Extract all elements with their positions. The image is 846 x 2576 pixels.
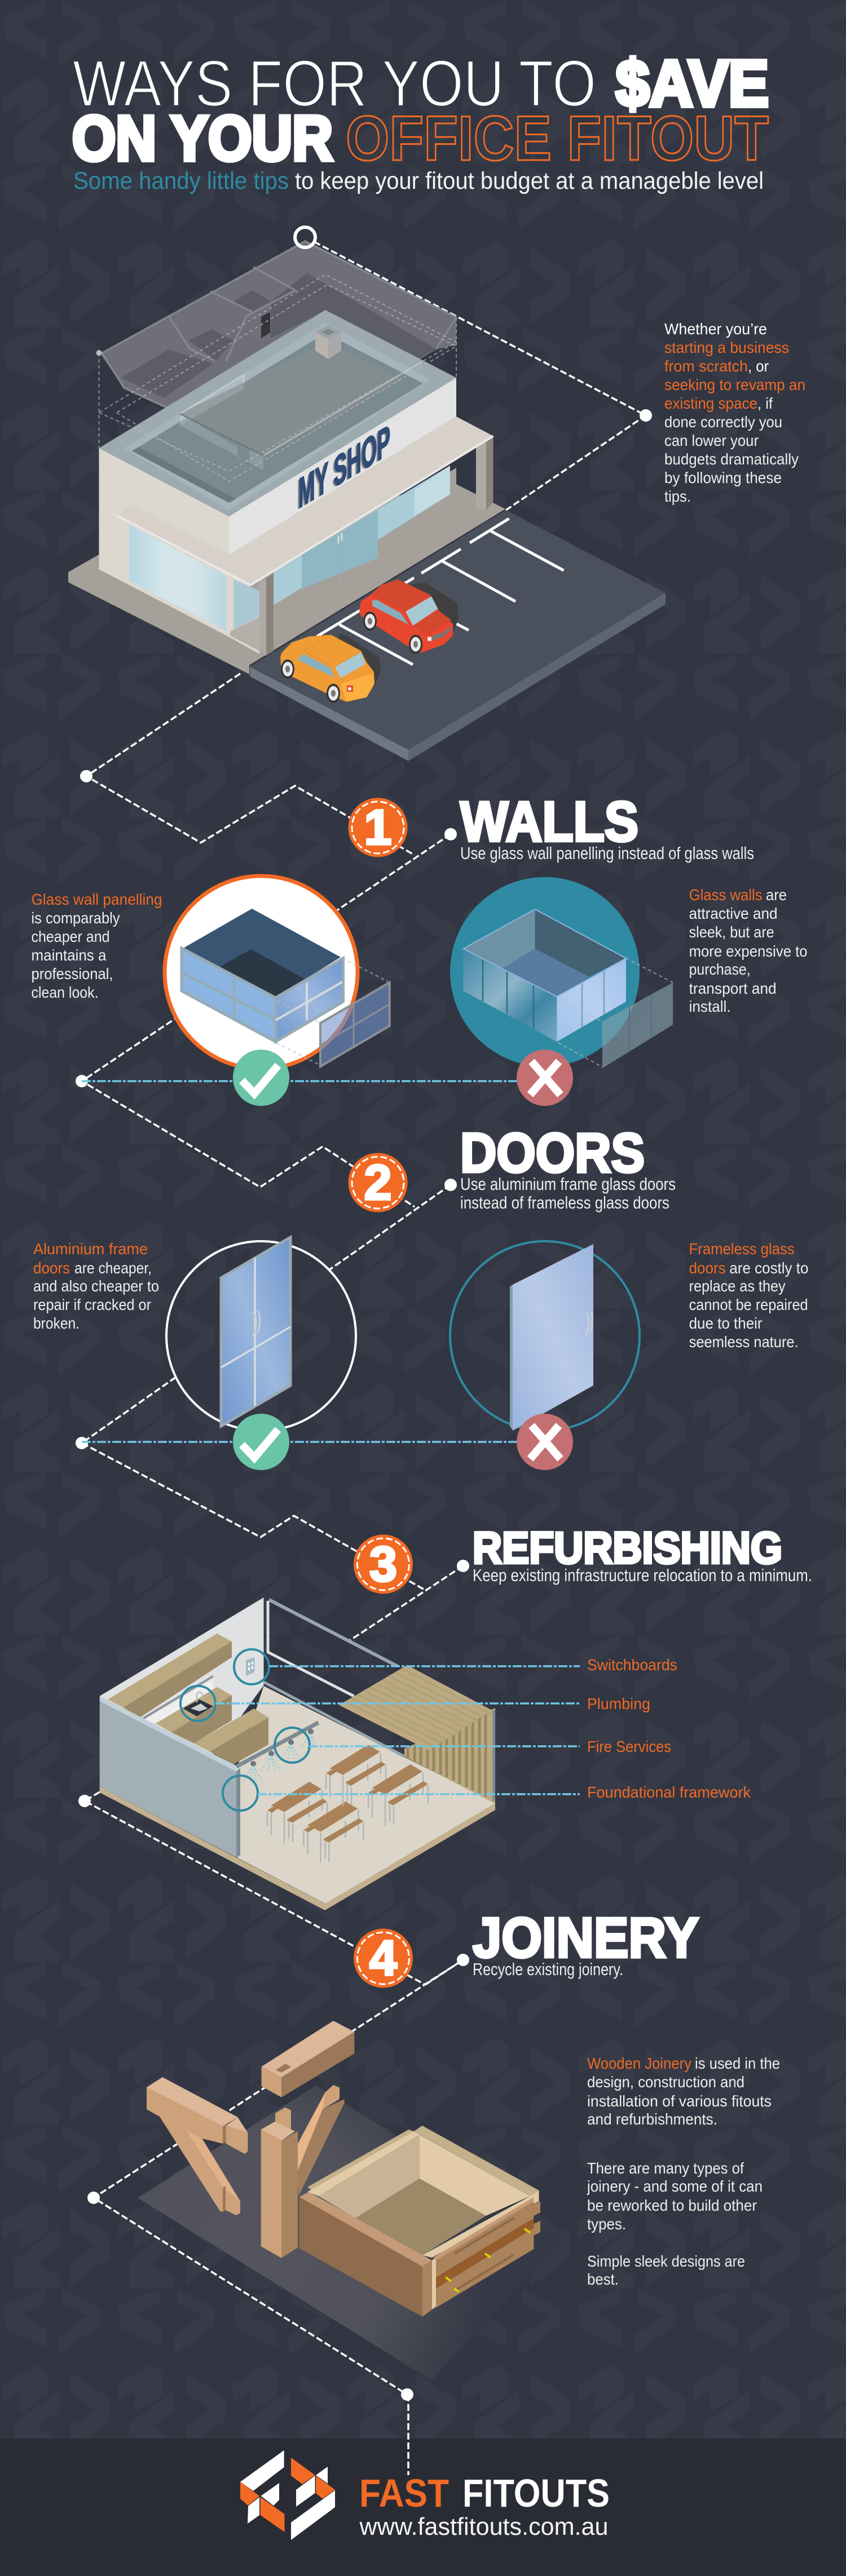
heading: doors: DOORS bbox=[460, 1122, 645, 1184]
switchboards leader bbox=[234, 1649, 580, 1684]
illustration: shop building bbox=[68, 241, 505, 674]
panel text: glass walls: install. bbox=[689, 998, 731, 1015]
panel text: aluminium frame doors: repair if cracked or bbox=[33, 1296, 151, 1313]
translucent ghost wall overlay bbox=[180, 362, 422, 470]
intro paragraph: , or bbox=[748, 357, 769, 375]
panel text: aluminium frame doors: broken. bbox=[33, 1314, 80, 1332]
top ring marker bbox=[295, 227, 315, 247]
illustration: shop building: MY SHOP bbox=[298, 416, 390, 518]
rear wall under awning bbox=[265, 468, 456, 631]
roof chimney bbox=[315, 325, 341, 359]
pillar front bbox=[230, 573, 274, 656]
handle bbox=[585, 1311, 592, 1335]
back wall bbox=[100, 1597, 263, 1776]
heading: refurbishing: REFURBISHING bbox=[473, 1522, 782, 1573]
joinery paragraph: Simple sleek designs are bbox=[587, 2252, 745, 2270]
cross icon: walls bbox=[517, 1050, 573, 1106]
walls subheading: Use glass wall panelling instead of glass walls bbox=[460, 843, 754, 863]
refurbishing labels: Plumbing bbox=[587, 1695, 650, 1712]
pillar right bbox=[476, 436, 493, 510]
glass leaf bbox=[513, 1244, 593, 1431]
panel text: glass wall panelling: professional, bbox=[32, 965, 113, 982]
base slab bbox=[68, 484, 505, 674]
connector: doors section bbox=[76, 1179, 457, 1590]
title word save: $AVE bbox=[616, 47, 769, 120]
glass shop front bbox=[274, 466, 450, 605]
joinery paragraph: and refurbishments. bbox=[587, 2110, 717, 2128]
dining tables bbox=[267, 1745, 428, 1863]
panel text: aluminium frame doors: are cheaper, bbox=[74, 1259, 152, 1277]
doors subheading bbox=[460, 1174, 676, 1212]
parking lines bbox=[317, 519, 564, 665]
footer website: www.fastfitouts.com.au bbox=[359, 2513, 608, 2540]
panel text: glass walls: Glass walls bbox=[689, 886, 763, 904]
footer brand name: FITOUTS bbox=[462, 2471, 610, 2515]
ring bbox=[166, 1241, 356, 1431]
connector: refurbishing section bbox=[78, 1560, 469, 1985]
doors subheading: instead of frameless glass doors bbox=[460, 1193, 669, 1212]
refurbishing labels bbox=[587, 1656, 751, 1801]
right glass bbox=[557, 958, 626, 1042]
red car bbox=[359, 579, 459, 654]
panel text: glass wall panelling: clean look. bbox=[32, 984, 98, 1001]
door leaf bbox=[221, 1237, 290, 1426]
panel text: frameless glass doors: seemless nature. bbox=[689, 1333, 799, 1351]
floor base bbox=[100, 1787, 495, 1910]
awning bbox=[116, 417, 493, 585]
roof bbox=[99, 310, 456, 516]
panel text: frameless glass doors: replace as they bbox=[689, 1277, 786, 1295]
joinery paragraph: be reworked to build other bbox=[587, 2197, 757, 2214]
white circle bbox=[165, 876, 358, 1069]
dovetail box bbox=[299, 2126, 540, 2317]
panel text: frameless glass doors: are costly to bbox=[729, 1259, 808, 1277]
orange car bbox=[280, 634, 381, 703]
fire services leader bbox=[275, 1728, 580, 1763]
badge 3 bbox=[354, 1534, 413, 1594]
intro paragraph bbox=[664, 320, 805, 505]
central post with arms bbox=[261, 2085, 344, 2258]
connector: joinery section bbox=[87, 1954, 469, 2475]
panel text: glass wall panelling bbox=[32, 891, 162, 1001]
box screws bbox=[446, 2229, 530, 2292]
badge 4 bbox=[354, 1929, 413, 1988]
left wall bbox=[99, 448, 259, 654]
panel text: glass walls: sleek, but are bbox=[689, 923, 774, 941]
cross icon: doors bbox=[517, 1414, 573, 1470]
detached beam bbox=[262, 2021, 354, 2097]
joinery paragraph bbox=[587, 2055, 780, 2288]
badge 1 bbox=[349, 798, 407, 857]
dashed ghost guides bbox=[96, 275, 456, 481]
illustration: glass walls bbox=[450, 877, 673, 1068]
upper cabinets bbox=[108, 1634, 232, 1723]
left panel bbox=[182, 948, 276, 1042]
panel text: glass wall panelling: maintains a bbox=[32, 946, 107, 964]
panel text: frameless glass doors: cannot be repaired bbox=[689, 1296, 808, 1313]
badge 1: 1 bbox=[364, 799, 391, 855]
door mullions bbox=[221, 1258, 290, 1406]
blue dashed link: doors bbox=[82, 1441, 518, 1443]
title bbox=[72, 47, 769, 174]
panel text: glass walls: are bbox=[766, 886, 787, 904]
ceiling bbox=[183, 909, 341, 998]
plumbing leader bbox=[180, 1686, 580, 1721]
ring bbox=[450, 1241, 640, 1431]
island counter bbox=[194, 1709, 268, 1764]
callout circles and leaders bbox=[180, 1649, 580, 1811]
subtitle: Some handy little tips bbox=[73, 167, 289, 194]
intro paragraph: starting a business bbox=[664, 339, 789, 356]
illustration: frameless door bbox=[450, 1241, 640, 1431]
panel text: glass wall panelling: Glass wall panelling bbox=[32, 891, 162, 908]
refurbishing labels: Fire Services bbox=[587, 1738, 671, 1755]
joinery paragraph: Wooden Joinery bbox=[587, 2055, 691, 2072]
panel text: frameless glass doors: due to their bbox=[689, 1314, 763, 1332]
panel text: glass walls: attractive and bbox=[689, 905, 778, 922]
panel text: glass wall panelling: cheaper and bbox=[32, 928, 109, 945]
badge 4: 4 bbox=[369, 1930, 397, 1986]
connector: walls section bbox=[76, 828, 457, 1207]
panel text: frameless glass doors: doors bbox=[689, 1259, 726, 1277]
badge 2: 2 bbox=[364, 1154, 391, 1210]
panel text: glass walls: purchase, bbox=[689, 961, 751, 978]
intro paragraph: Whether you’re bbox=[664, 320, 767, 338]
panel text: glass walls: more expensive to bbox=[689, 942, 808, 960]
title line 2 outlined text: OFFICE FITOUT bbox=[346, 103, 769, 174]
panel text: frameless glass doors bbox=[689, 1240, 808, 1351]
panel text: aluminium frame doors bbox=[33, 1240, 159, 1332]
detached panel bbox=[320, 982, 390, 1066]
joinery paragraph: installation of various fitouts bbox=[587, 2092, 772, 2110]
illustration: office room bbox=[100, 1597, 496, 1910]
dotted guides bbox=[558, 958, 673, 1067]
switchboard bbox=[246, 1657, 255, 1676]
upper facade bbox=[229, 378, 456, 555]
footer brand name: FAST bbox=[359, 2471, 449, 2515]
joinery paragraph: design, construction and bbox=[587, 2073, 744, 2091]
detached panel bbox=[602, 982, 673, 1068]
intro paragraph: can lower your bbox=[664, 432, 759, 449]
back right wall bbox=[535, 909, 626, 977]
doors subheading: Use aluminium frame glass doors bbox=[460, 1174, 676, 1194]
intro paragraph: done correctly you bbox=[664, 413, 782, 431]
panel text: frameless glass doors: Frameless glass bbox=[689, 1240, 795, 1258]
footer band background bbox=[0, 2438, 846, 2576]
intro paragraph: by following these bbox=[664, 469, 782, 486]
refurbishing labels: Foundational framework bbox=[587, 1783, 751, 1801]
blue dashed link: walls bbox=[82, 1080, 518, 1082]
tick icon: doors bbox=[233, 1414, 289, 1470]
heading: walls: WALLS bbox=[460, 790, 638, 853]
left wall bbox=[100, 1701, 236, 1857]
tick icon: walls bbox=[233, 1050, 289, 1106]
heading: joinery: JOINERY bbox=[473, 1906, 699, 1969]
subtitle: to keep your fitout budget at a manageble level bbox=[295, 167, 764, 194]
shop sign bbox=[297, 416, 390, 519]
joinery paragraph: is used in the bbox=[695, 2055, 780, 2072]
badge 3: 3 bbox=[369, 1536, 397, 1592]
illustration: glass wall panelling bbox=[165, 876, 390, 1069]
handles bbox=[253, 1311, 259, 1336]
joinery subheading: Recycle existing joinery. bbox=[473, 1959, 623, 1979]
footer brand name bbox=[359, 2471, 610, 2515]
window frame bbox=[264, 1600, 404, 1756]
window near pillar bbox=[233, 579, 259, 630]
right panel bbox=[276, 958, 343, 1042]
left bracket bbox=[147, 2077, 248, 2215]
floor bbox=[236, 1686, 496, 1904]
subtitle bbox=[73, 167, 764, 194]
kitchen counter bbox=[156, 1687, 232, 1743]
illustration: shop building: MY SHOP bbox=[297, 418, 389, 519]
title line 2 bold text: ON YOUR bbox=[72, 103, 333, 174]
panel text: aluminium frame doors: Aluminium frame bbox=[33, 1240, 148, 1258]
dotted guides bbox=[276, 958, 390, 1065]
side edge bbox=[510, 1285, 513, 1431]
joinery floor shadow bbox=[138, 2086, 564, 2380]
slatted ceiling bbox=[339, 1665, 495, 1804]
badge 2 bbox=[349, 1153, 407, 1212]
illustration: aluminium frame door bbox=[166, 1237, 356, 1431]
refurbishing labels: Switchboards bbox=[587, 1656, 677, 1674]
intro paragraph: seeking to revamp an bbox=[664, 376, 805, 393]
joinery paragraph: types. bbox=[587, 2215, 626, 2233]
joinery paragraph: There are many types of bbox=[587, 2159, 744, 2177]
panel text: glass walls: transport and bbox=[689, 980, 777, 997]
panel text: aluminium frame doors: doors bbox=[33, 1259, 70, 1277]
back left wall bbox=[463, 909, 535, 968]
sink bbox=[183, 1692, 213, 1716]
teal circle bbox=[450, 877, 640, 1066]
panel text: aluminium frame doors: and also cheaper to bbox=[33, 1277, 159, 1295]
panel text: glass wall panelling: is comparably bbox=[32, 909, 120, 927]
illustration: joinery pieces bbox=[147, 2021, 540, 2317]
left glass bbox=[463, 949, 557, 1042]
intro paragraph: tips. bbox=[664, 488, 691, 505]
footer logo mark bbox=[240, 2450, 335, 2540]
ghost upper storey bbox=[100, 241, 456, 455]
joinery paragraph: best. bbox=[587, 2270, 619, 2288]
sprinkler system bbox=[236, 1723, 319, 1782]
floor bbox=[503, 949, 589, 997]
panel text: glass walls bbox=[689, 886, 808, 1015]
foundational framework leader bbox=[223, 1776, 580, 1811]
illustration: car park bbox=[250, 510, 666, 761]
window left bbox=[129, 525, 226, 631]
connector: top section bbox=[80, 242, 652, 855]
title line 1 light text: WAYS FOR YOU TO bbox=[73, 47, 596, 120]
intro paragraph: existing space bbox=[664, 395, 757, 412]
intro paragraph: budgets dramatically bbox=[664, 450, 799, 468]
joinery paragraph: joinery - and some of it can bbox=[587, 2177, 763, 2195]
intro paragraph: from scratch bbox=[664, 357, 748, 375]
intro paragraph: , if bbox=[757, 395, 773, 412]
car park slab bbox=[250, 510, 666, 761]
